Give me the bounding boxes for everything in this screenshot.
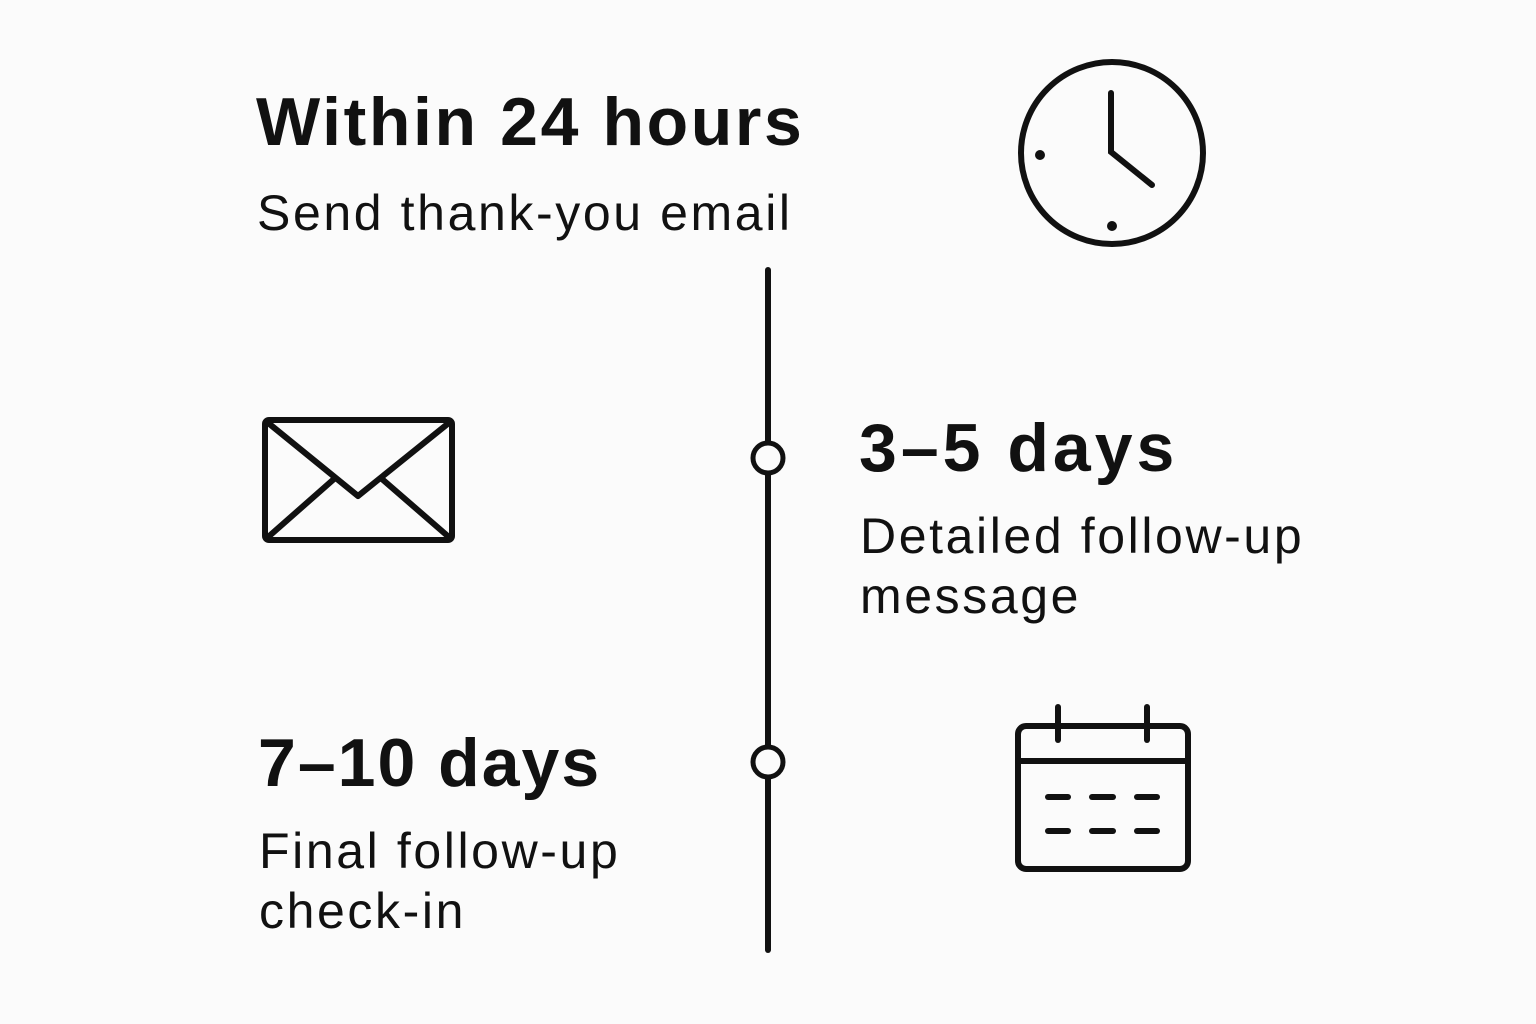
step 3 text: check-in [259, 883, 466, 939]
icon: envelope [265, 420, 452, 540]
step 1 text: Send thank-you email [257, 185, 793, 241]
icon: calendar [1018, 707, 1188, 869]
timeline node: 3-5 days [753, 443, 783, 473]
step 3 text: Final follow-up [259, 823, 620, 879]
step 2 text: message [860, 568, 1081, 624]
icon: clock [1021, 62, 1203, 244]
step 3 heading: 7–10 days [258, 725, 601, 801]
step 2 text: Detailed follow-up [860, 508, 1304, 564]
step 3 text [259, 823, 620, 939]
step 2 heading: 3–5 days [859, 410, 1178, 486]
step 1 heading: Within 24 hours [256, 84, 804, 160]
step 2 text [860, 508, 1304, 624]
timeline node: 7-10 days [753, 747, 783, 777]
timeline line [765, 270, 771, 950]
